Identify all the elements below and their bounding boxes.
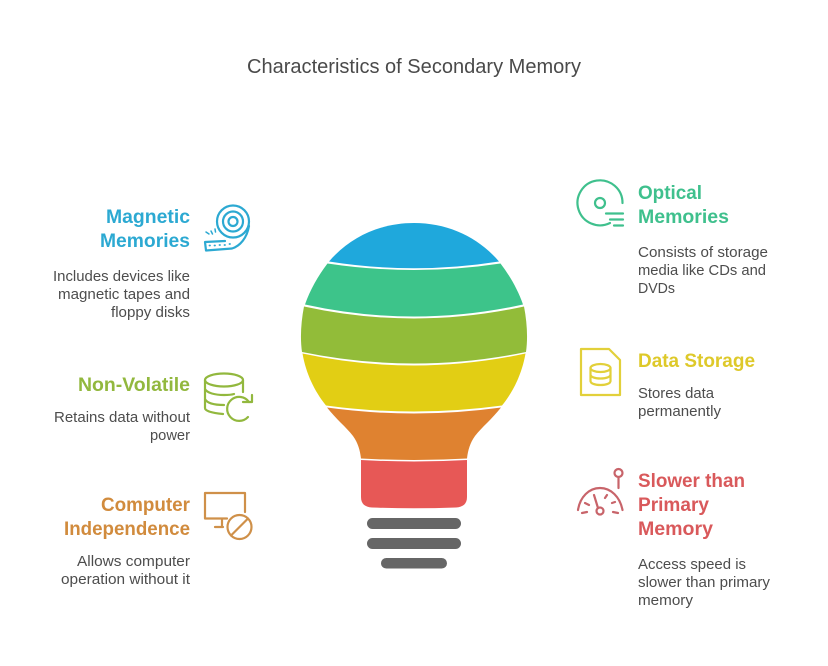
heading: Computer — [101, 494, 190, 516]
heading: Data Storage — [638, 350, 755, 372]
description: DVDs — [638, 281, 675, 297]
heading: Non-Volatile — [78, 374, 190, 396]
description: Includes devices like — [53, 269, 190, 285]
bulb segment: yellow — [302, 354, 526, 412]
icon: tape reel — [205, 206, 249, 250]
light bulb — [301, 223, 527, 568]
description — [638, 386, 722, 420]
heading: Slower than — [638, 470, 745, 492]
heading: Memories — [100, 230, 190, 252]
heading — [638, 470, 745, 540]
icon: optical disc — [578, 180, 623, 226]
description: media like CDs and — [638, 263, 766, 279]
icon: monitor with prohibition sign — [205, 493, 252, 539]
heading: Independence — [64, 518, 190, 540]
heading: Magnetic — [106, 206, 190, 228]
item: Slower than Primary Memory — [578, 469, 771, 609]
description — [54, 410, 190, 444]
title: Characteristics of Secondary Memory — [247, 56, 581, 78]
item: Optical Memories — [578, 180, 768, 297]
description: Consists of storage — [638, 245, 768, 261]
heading: Optical — [638, 182, 702, 204]
bulb segment: red — [361, 460, 467, 508]
description — [638, 557, 771, 609]
heading: Memory — [638, 518, 713, 540]
icon: speed gauge — [578, 469, 622, 514]
bulb segment: orange — [327, 408, 501, 460]
description: Retains data without — [54, 410, 190, 426]
description: permanently — [638, 404, 722, 420]
description: slower than primary — [638, 575, 771, 591]
description: Allows computer — [77, 554, 190, 570]
item: Magnetic Memories — [53, 206, 249, 321]
description: floppy disks — [111, 305, 190, 321]
bulb segment: green — [305, 264, 523, 316]
heading — [100, 206, 190, 252]
description — [53, 269, 190, 321]
heading: Memories — [638, 206, 729, 228]
description: Stores data — [638, 386, 715, 402]
description: memory — [638, 593, 694, 609]
item: Data Storage — [581, 349, 755, 420]
description — [61, 554, 190, 588]
bulb segment: blue — [329, 223, 499, 268]
screw base bars — [367, 518, 461, 568]
description: power — [150, 428, 190, 444]
heading: Primary — [638, 494, 709, 516]
description: Access speed is — [638, 557, 746, 573]
bulb segment: olive — [301, 306, 527, 364]
description: magnetic tapes and — [58, 287, 190, 303]
heading — [638, 182, 729, 228]
item: Computer Independence — [61, 493, 252, 588]
description — [638, 245, 768, 297]
icon: data file — [581, 349, 620, 395]
heading — [64, 494, 190, 540]
icon: database with refresh — [205, 374, 252, 421]
item: Non-Volatile — [54, 374, 252, 444]
description: operation without it — [61, 572, 190, 588]
